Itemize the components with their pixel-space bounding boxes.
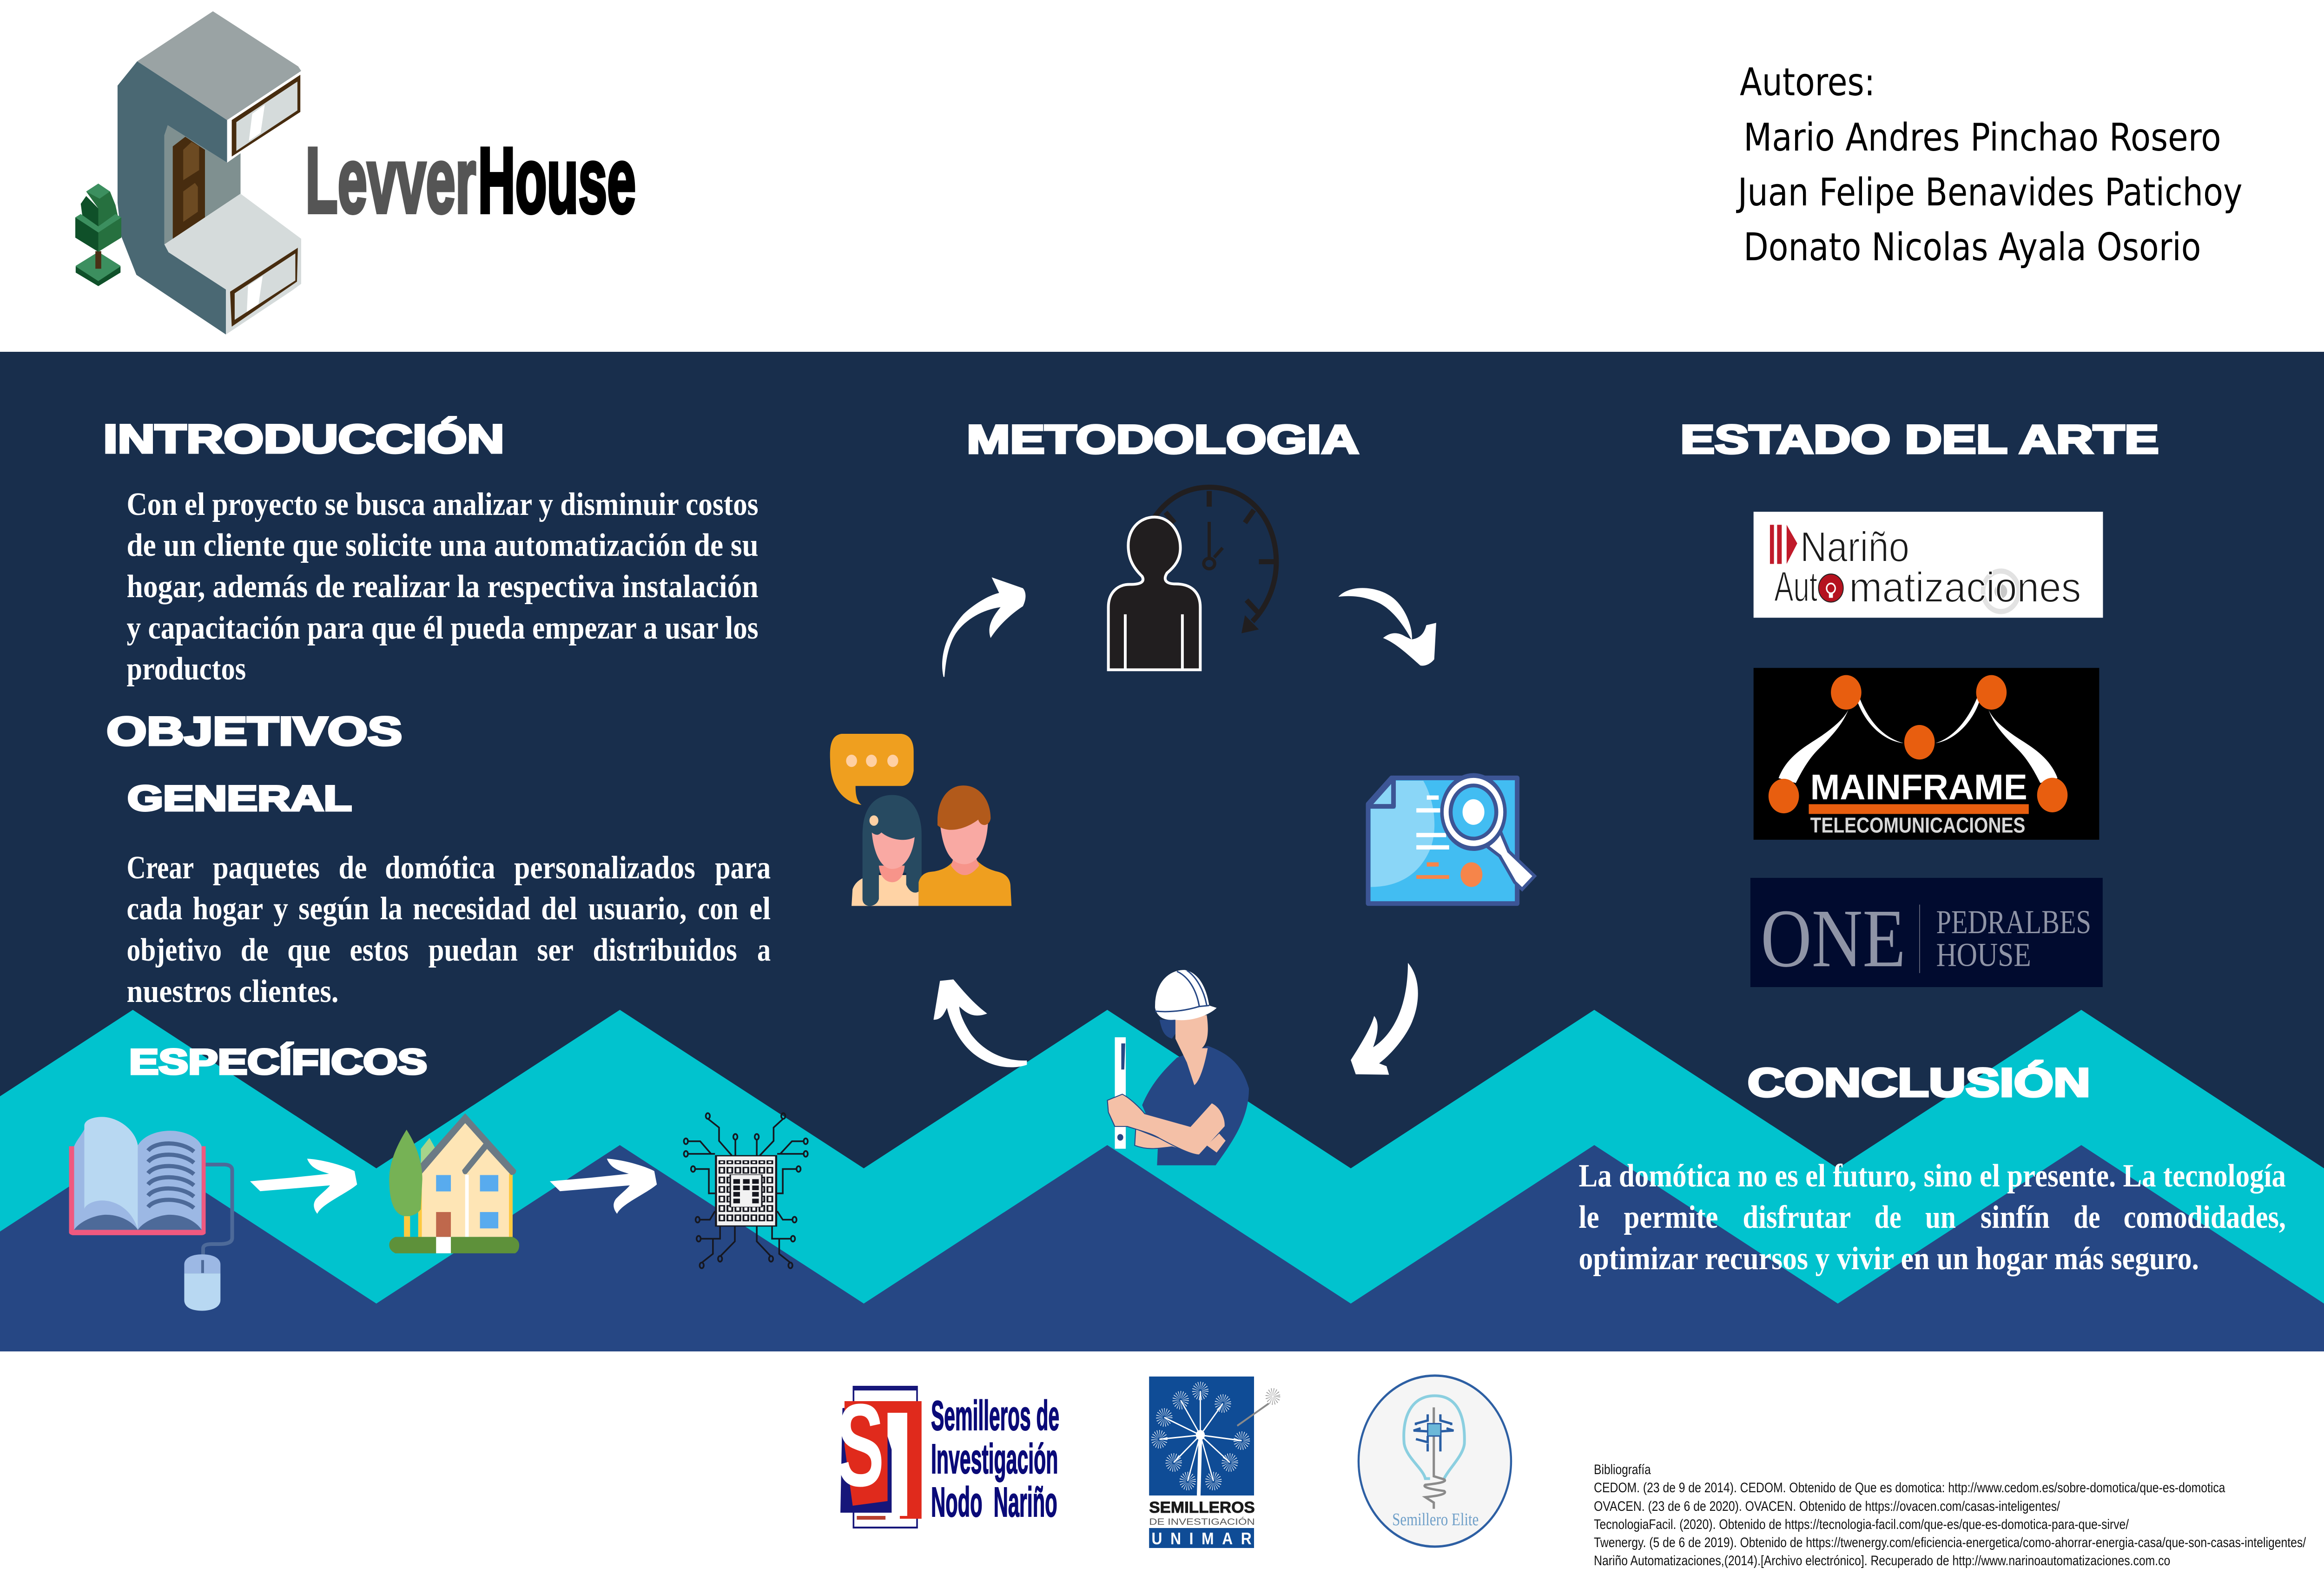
text block: general objective: ser <box>537 932 574 968</box>
text block: general objective: según <box>298 890 370 927</box>
icon: two people talking <box>830 734 1011 906</box>
text block: introduction: y capacitación para que él pueda empezar a usar los <box>127 610 759 646</box>
text block: conclusion: sinfín <box>1981 1199 2050 1235</box>
heading: estado del arte: ESTADO DEL ARTE <box>1680 418 2159 462</box>
arrow: to person <box>942 577 1025 677</box>
logo: Nariño Automatizaciones <box>1754 512 2103 618</box>
logo: Semilleros Unimar: UNIMAR <box>1152 1529 1252 1548</box>
logo: Mainframe Telecomunicaciones: MAINFRAME <box>1810 767 2027 807</box>
logo: Semilleros de Investigación Nodo Nariño: Investigación <box>931 1435 1058 1482</box>
text block: introduction: hogar, además de realizar la respectiva instalación <box>127 568 759 605</box>
text block: general objective: paquetes <box>213 850 320 886</box>
logo: Mainframe Telecomunicaciones: TELECOMUNICACIONES <box>1810 813 2025 837</box>
text block: conclusion: comodidades, <box>2124 1199 2286 1235</box>
arrow: to people <box>933 980 1027 1067</box>
logo: LevverHouse isometric house and tree <box>75 11 301 335</box>
logo: One Pedralbes House: ONE <box>1761 893 1906 984</box>
logo: One Pedralbes House: PEDRALBES <box>1936 903 2091 941</box>
text block: general objective: el <box>749 890 771 927</box>
text block: general objective: puedan <box>429 932 518 968</box>
logo: Semilleros de Investigación Nodo Nariño <box>836 1379 1059 1528</box>
text block: conclusion: de <box>1874 1199 1901 1235</box>
text block: general objective <box>127 850 771 1009</box>
text block: conclusion: le <box>1579 1199 1599 1235</box>
logo: Semilleros de Investigación Nodo Nariño: S <box>836 1379 884 1511</box>
text block: bibliography: Bibliografía <box>1594 1461 1651 1477</box>
blue mountain band <box>0 1145 2324 1351</box>
text block: general objective: la <box>380 890 403 927</box>
text block: general objective: distribuidos <box>593 932 737 968</box>
heading: conclusión: CONCLUSIÓN <box>1748 1061 2090 1105</box>
text block: conclusion: disfrutar <box>1743 1199 1851 1235</box>
text block: general objective: necesidad <box>413 890 530 927</box>
text block: general objective: estos <box>350 932 409 968</box>
text block: bibliography: TecnologiaFacil. (2020). Obtenido de https://tecnologia-facil.com/que-es/que-es-domotica-para-que-sirve/ <box>1594 1516 2129 1532</box>
heading: objetivos: OBJETIVOS <box>106 710 402 754</box>
heading: general: GENERAL <box>127 779 352 818</box>
text block: conclusion: optimizar recursos y vivir en un hogar más seguro. <box>1579 1240 2199 1277</box>
text block: general objective: con <box>698 890 738 927</box>
text block: general objective: que <box>287 932 330 968</box>
logo: One Pedralbes House: HOUSE <box>1936 936 2031 973</box>
logo wordmark: House <box>478 128 636 232</box>
text block: bibliography: OVACEN. (23 de 6 de 2020). OVACEN. Obtenido de https://ovacen.com/casas-inteligentes/ <box>1594 1498 2060 1514</box>
logo: Semillero Elite: Semillero Elite <box>1392 1509 1479 1529</box>
logo: Nariño Automatizaciones: matizaciones <box>1849 564 2081 611</box>
text block: general objective: Crear <box>127 850 194 886</box>
arrow: book to house <box>250 1159 357 1214</box>
text block: general objective: nuestros clientes. <box>127 973 339 1009</box>
specific objectives icon row <box>69 1113 808 1311</box>
logo: Semilleros de Investigación Nodo Nariño: Nodo Nariño <box>931 1478 1057 1525</box>
text block: general objective: de <box>339 850 367 886</box>
text block: introduction <box>127 486 759 687</box>
state of the art logos <box>1750 512 2103 987</box>
text block: general objective: del <box>541 890 577 927</box>
heading: introducción: INTRODUCCIÓN <box>103 417 504 461</box>
teal mountain band <box>0 1010 2324 1351</box>
icon: book and mouse <box>69 1117 232 1311</box>
logo wordmark: Levver <box>305 128 476 232</box>
methodology cycle <box>830 487 1535 1166</box>
text block: conclusion: La domótica no es el futuro, sino el presente. La tecnología <box>1579 1158 2286 1194</box>
text block: authors: Autores: <box>1740 60 1875 105</box>
logo: Semillero Elite <box>1359 1376 1511 1547</box>
icon: house with trees <box>389 1113 519 1253</box>
text block: authors: Juan Felipe Benavides Patichoy <box>1736 171 2242 215</box>
text block: conclusion: un <box>1925 1199 1956 1235</box>
text block: authors: Mario Andres Pinchao Rosero <box>1743 116 2221 160</box>
panel: dark navy main band <box>0 352 2324 1351</box>
logo: Nariño Automatizaciones: Nariño <box>1800 523 1909 571</box>
text block: conclusion: permite <box>1624 1199 1718 1235</box>
text block: conclusion: de <box>2073 1199 2100 1235</box>
text block: general objective: objetivo <box>127 932 222 968</box>
icon: circuit chip <box>684 1113 808 1268</box>
text block: general objective: y <box>273 890 288 927</box>
logo: Mainframe Telecomunicaciones <box>1754 668 2099 840</box>
text block: general objective: personalizados <box>514 850 695 886</box>
heading: específicos: ESPECÍFICOS <box>129 1042 427 1082</box>
text block: introduction: productos <box>127 651 246 687</box>
text block: general objective: domótica <box>385 850 495 886</box>
logo: Semilleros de Investigación Nodo Nariño: Semilleros de <box>931 1392 1059 1439</box>
logo: Semilleros Unimar: DE INVESTIGACIÓN <box>1149 1516 1255 1527</box>
text block: general objective: usuario, <box>588 890 687 927</box>
text block: general objective: hogar <box>193 890 263 927</box>
logo: Semilleros Unimar <box>1149 1377 1277 1548</box>
text block: conclusion <box>1579 1158 2286 1277</box>
text block: introduction: Con el proyecto se busca analizar y disminuir costos <box>127 486 759 522</box>
icon: person with clock <box>1109 487 1276 670</box>
text block: introduction: de un cliente que solicite una automatización de su <box>127 527 759 563</box>
text block: bibliography <box>1594 1461 2306 1568</box>
text block: general objective: a <box>757 932 771 968</box>
text block: authors: Donato Nicolas Ayala Osorio <box>1743 225 2201 270</box>
arrow: house to chip <box>550 1159 657 1214</box>
text block: authors <box>1736 60 2242 270</box>
icon: document with magnifier <box>1368 773 1535 903</box>
icon: worker with helmet and level <box>1107 970 1249 1166</box>
logo: One Pedralbes House <box>1750 878 2103 987</box>
heading: metodologia: METODOLOGIA <box>967 418 1359 462</box>
arrow: to worker <box>1351 963 1418 1075</box>
text block: general objective: de <box>241 932 269 968</box>
text block: general objective: para <box>715 850 771 886</box>
text block: bibliography: Nariño Automatizaciones,(2014).[Archivo electrónico]. Recuperado de http://www.narinoautomatizaciones.com.co <box>1594 1552 2170 1568</box>
logo: Nariño Automatizaciones: Aut <box>1774 563 1817 611</box>
text block: bibliography: CEDOM. (23 de 9 de 2014). CEDOM. Obtenido de Que es domotica: http://www.cedom.es/sobre-domotica/que-es-domotica <box>1594 1479 2225 1495</box>
text block: general objective: cada <box>127 890 182 927</box>
logo: Semilleros Unimar: SEMILLEROS <box>1149 1498 1255 1516</box>
arrow: to document <box>1338 588 1436 665</box>
